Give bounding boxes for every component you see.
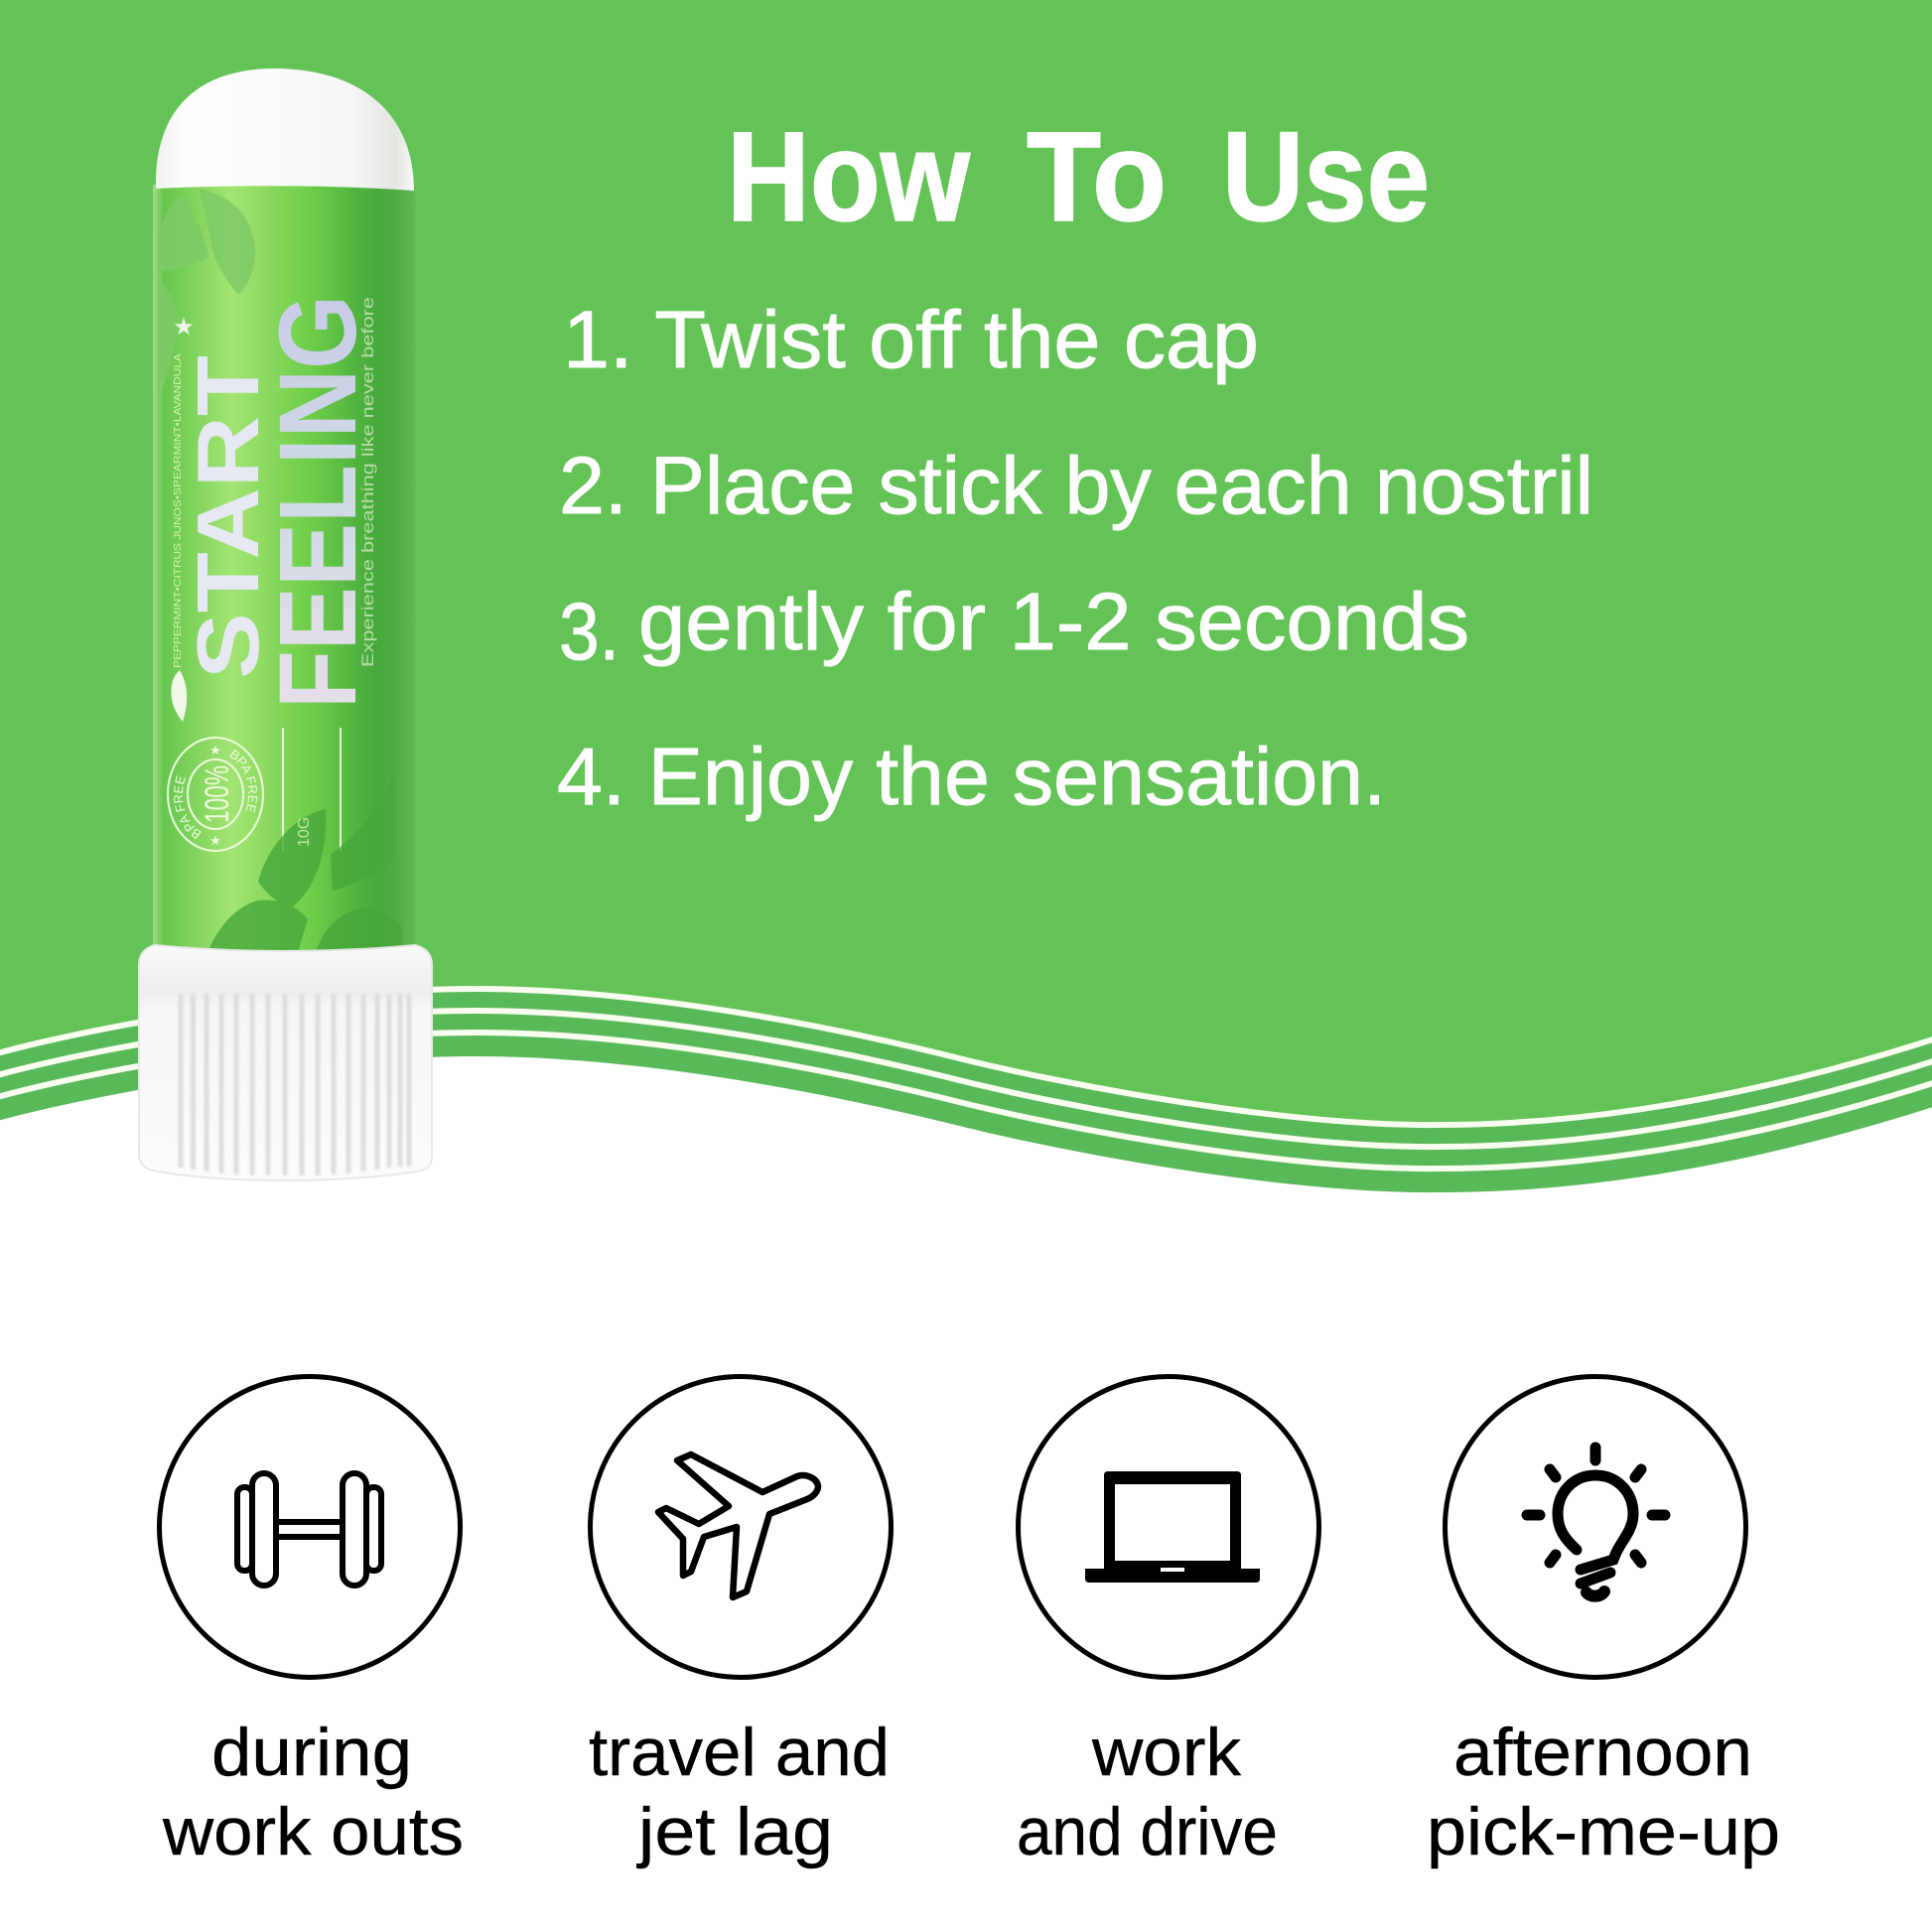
caption: travel and jet lag: travel and [589,1715,890,1790]
FEELING wordmark: FEELING [257,295,379,709]
BPA free seal: ★ [209,743,221,758]
caption: afternoon pick-me-up: afternoon [1453,1715,1752,1790]
title: Use [1222,106,1430,248]
caption: afternoon pick-me-up [1427,1715,1780,1869]
step 1: 1. Twist off the cap [563,295,1259,385]
icon: light bulb [1446,1376,1745,1678]
ingredients line: PEPPERMINT•CITRUS JUNOS•SPEARMINT•LAVANDULA [172,353,184,668]
icon: airplane [590,1376,892,1678]
product: nasal inhaler stick [138,69,433,1181]
thin label rules [283,728,341,851]
white cap [156,69,414,191]
tube label [153,185,415,993]
translucent leaves at top of label [159,189,255,393]
caption: during work outs: work outs [162,1794,464,1869]
title [727,106,1430,248]
caption: during work outs: during [211,1715,412,1790]
wave stripes [0,989,1932,1169]
small leaf logo [171,670,187,722]
10G net weight: 10G [296,817,313,847]
ribbed collar [139,945,432,1180]
tagline: Experience breathing like never before [359,297,377,667]
BPA free seal: BPA FREE [229,749,258,813]
star: ★ [173,314,195,341]
caption: travel and jet lag [589,1715,890,1869]
title: To [1027,106,1167,248]
step 3: gently for 1-2 seconds [638,577,1469,667]
green header panel [0,0,1932,1125]
BPA free seal: 100% [199,765,236,823]
caption: during work outs [162,1715,464,1869]
caption: work and drive: and drive [1017,1794,1278,1869]
BPA free seal: BPA FREE [174,775,202,840]
icon: laptop [1019,1376,1318,1678]
caption: work and drive [1017,1715,1278,1869]
steps list [557,295,1593,822]
title: How [727,106,970,248]
step 3: 3. [559,587,620,677]
START wordmark: START [179,355,277,679]
caption: travel and jet lag: jet lag [636,1794,833,1869]
BPA free seal [167,737,264,852]
icon: dumbbell [159,1376,461,1678]
step 2: 2. Place stick by each nostril [559,441,1593,531]
caption: work and drive: work [1091,1715,1242,1790]
dark leaves at bottom of label [208,767,402,955]
BPA free seal: ★ [209,833,221,848]
step 4: 4. Enjoy the sensation. [557,732,1386,822]
green wave band [0,0,1932,1192]
caption: afternoon pick-me-up: pick-me-up [1427,1794,1780,1869]
